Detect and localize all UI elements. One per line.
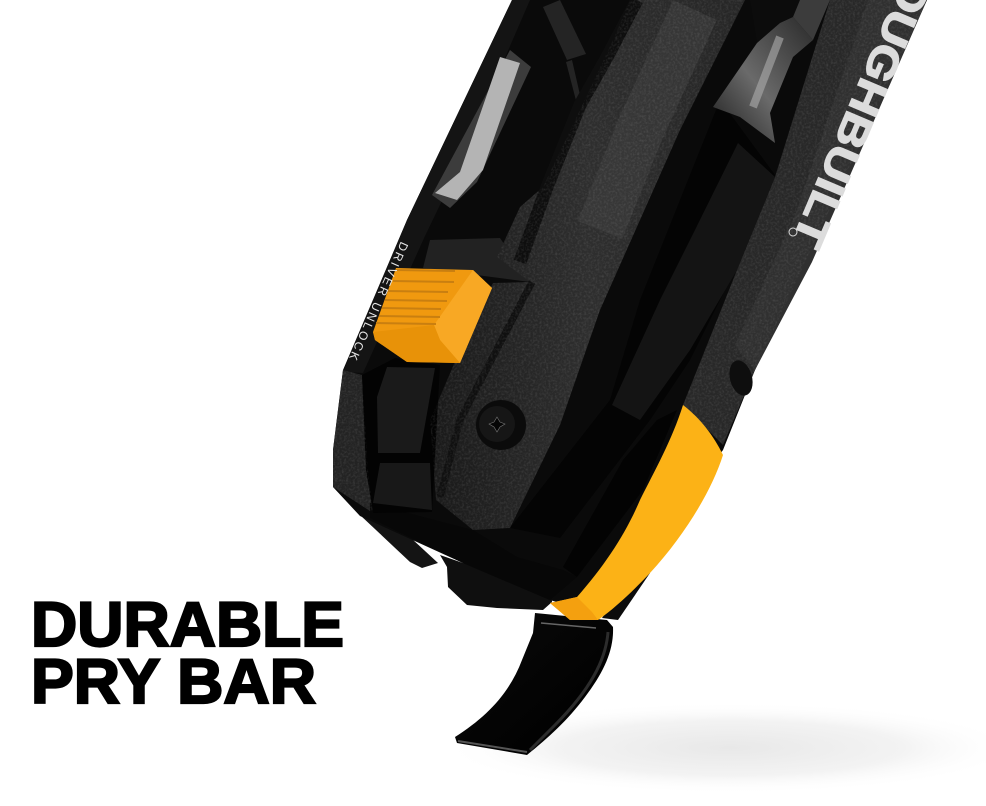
left rail	[343, 0, 530, 373]
tool body silhouette	[333, 0, 927, 615]
upper hex shaft	[750, 0, 830, 43]
right outer band	[683, 0, 927, 445]
glossy strip beside guard	[563, 410, 677, 577]
blade rim	[432, 50, 531, 208]
screw	[476, 400, 526, 450]
central textured bar	[430, 0, 745, 530]
flat blade bit	[435, 57, 520, 200]
bar highlight	[600, 10, 695, 230]
ground shadow	[440, 702, 986, 794]
pry bar	[455, 613, 613, 755]
black channel	[510, 100, 775, 538]
bar ridge shadow	[520, 0, 637, 262]
title: DURABLE	[31, 590, 344, 660]
lower middle jaw	[440, 555, 552, 610]
left textured panel	[333, 370, 373, 513]
orange unlock slider	[373, 268, 492, 363]
bit tip	[793, 0, 830, 40]
front lower blocks	[362, 358, 440, 513]
folded tool rods	[543, 0, 586, 112]
lower ridge shadow	[440, 282, 532, 497]
rear jaw	[602, 560, 650, 620]
channel panel	[612, 143, 775, 420]
slider housing	[423, 238, 530, 282]
title: PRY BAR	[31, 647, 316, 717]
title	[31, 590, 344, 717]
hex driver bit	[713, 17, 813, 143]
lower left jaw	[360, 500, 438, 568]
texture overlay	[320, 0, 940, 540]
side screw recess	[726, 358, 756, 398]
logo band	[735, 0, 927, 370]
yellow pry guard	[550, 405, 723, 620]
driver unlock label: DRIVER UNLOCK	[346, 240, 411, 362]
bottom dark surround	[370, 503, 577, 600]
bit highlight	[753, 37, 780, 107]
